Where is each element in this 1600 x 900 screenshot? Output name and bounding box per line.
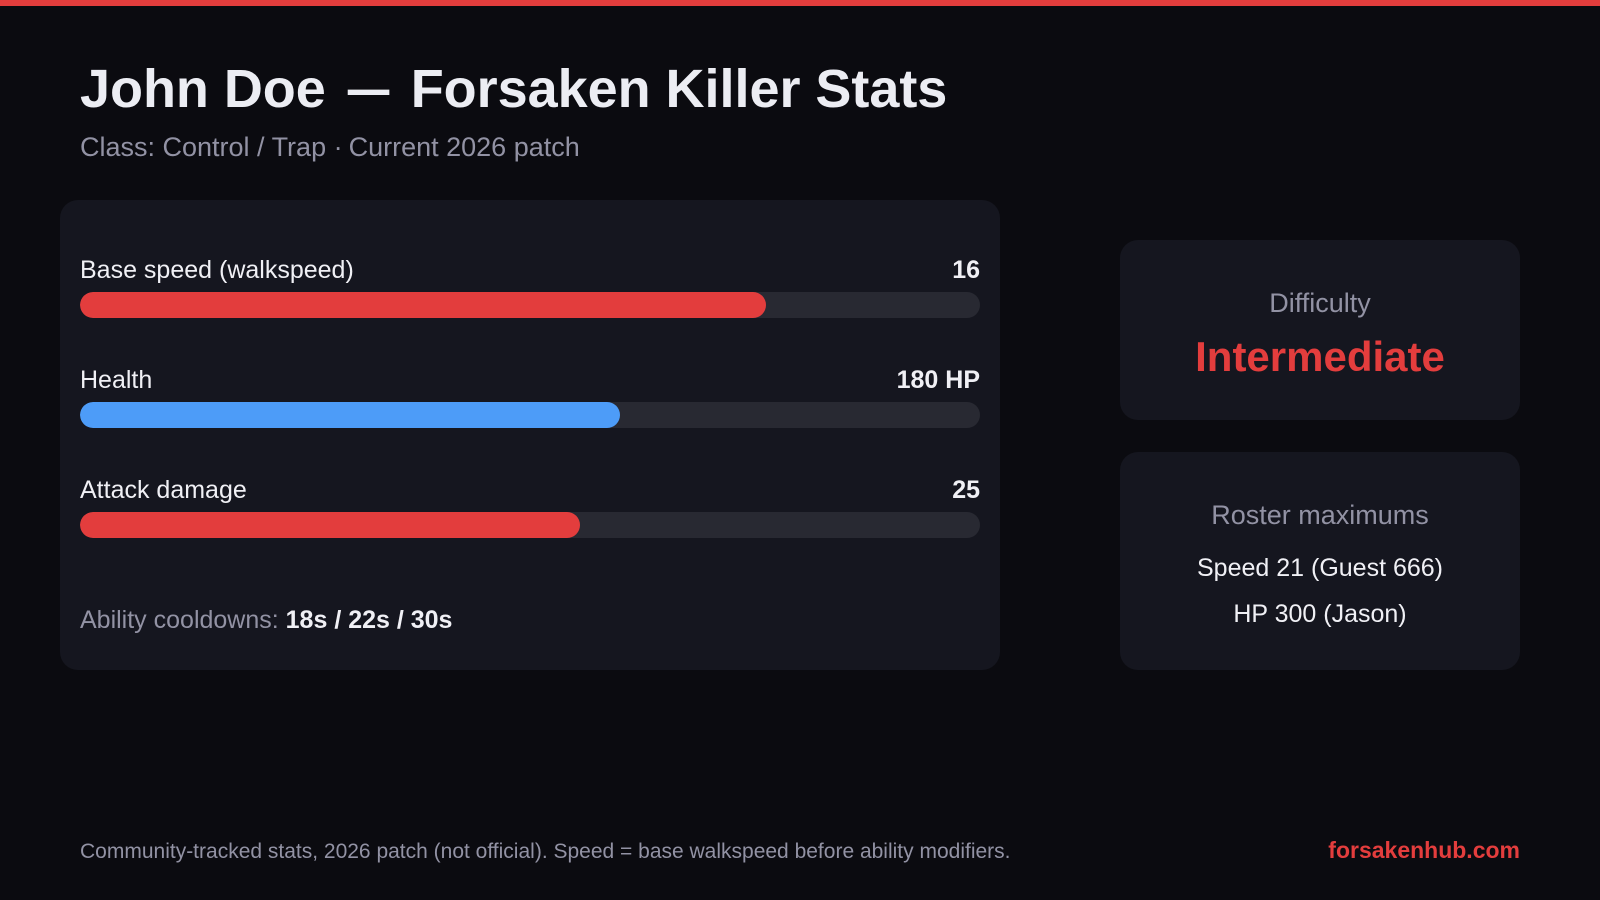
title: — [347, 59, 389, 119]
subtitle: Class: Control / Trap · Current 2026 patch [80, 132, 580, 162]
roster speed: Speed 21 (Guest 666) [1197, 554, 1443, 582]
difficulty value: Intermediate [1195, 333, 1445, 380]
top accent bar [0, 0, 1600, 6]
bar: attack damage [80, 512, 980, 538]
title: John Doe Forsaken Killer Stats [80, 59, 947, 119]
panel: roster maximums [1120, 452, 1520, 670]
value: base speed: 16 [952, 256, 980, 284]
value: attack damage: 25 [952, 476, 980, 504]
difficulty label: Difficulty [1269, 288, 1371, 318]
ability cooldowns: Ability cooldowns: 18s / 22s / 30s [80, 606, 452, 634]
roster hp: HP 300 (Jason) [1233, 600, 1407, 628]
label: base speed: Base speed (walkspeed) [80, 256, 354, 284]
source link: forsakenhub.com [1328, 837, 1520, 863]
value: health: 180 HP [897, 366, 980, 394]
footnote: Community-tracked stats, 2026 patch (not official). Speed = base walkspeed before ability modifiers. [80, 840, 1011, 863]
label: health: Health [80, 366, 152, 394]
panel: stat bars [60, 200, 1000, 670]
label: attack damage: Attack damage [80, 476, 247, 504]
bar: base speed [80, 292, 980, 318]
panel: difficulty [1120, 240, 1520, 420]
bar: health [80, 402, 980, 428]
roster heading: Roster maximums [1211, 500, 1429, 530]
